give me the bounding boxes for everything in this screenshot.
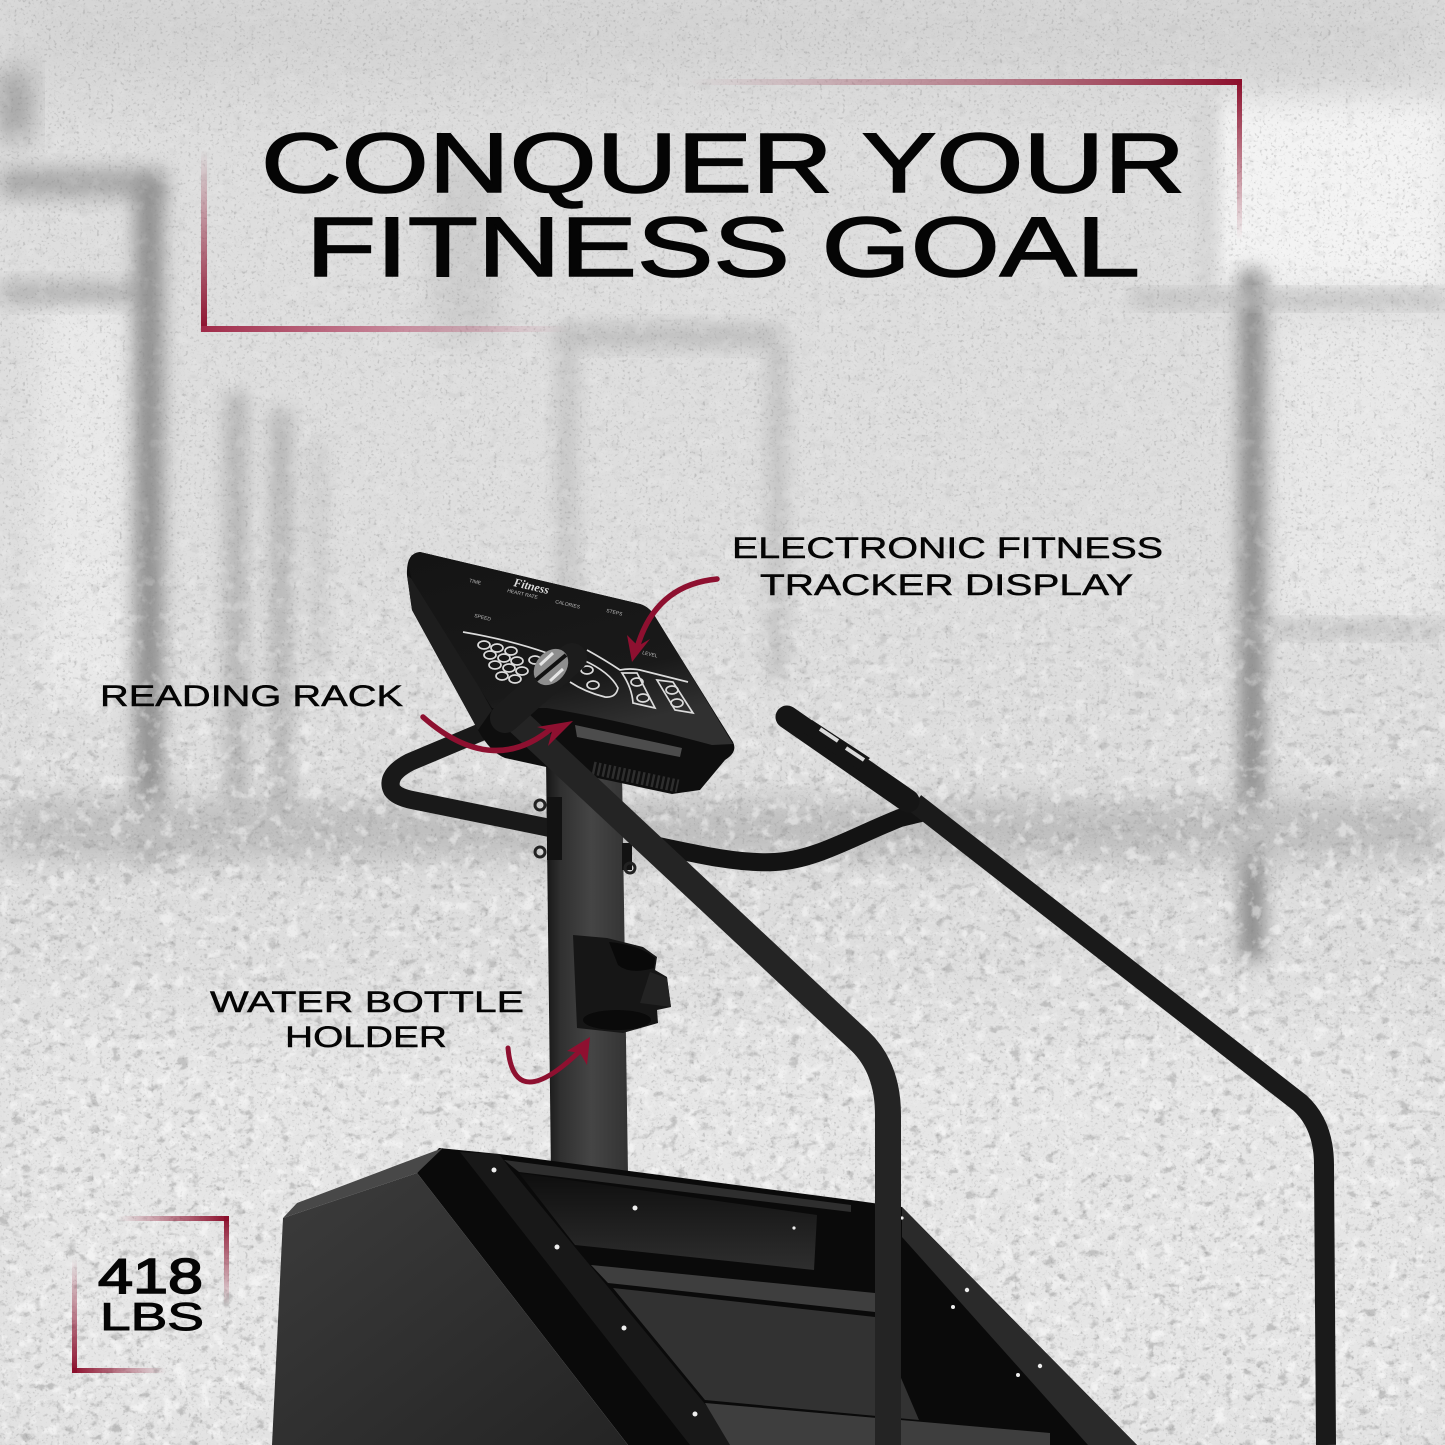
label: electronic fitness tracker display: ELECTRONIC FITNESS: [732, 532, 1163, 565]
machine: water bottle holder: [573, 935, 671, 1033]
label: electronic fitness tracker display: TRACKER DISPLAY: [760, 569, 1133, 602]
arrow: reading rack: [423, 717, 573, 751]
badge frame: [72, 1216, 229, 1373]
machine: console labels: LEVEL: [642, 650, 658, 659]
badge text: 418: [98, 1250, 203, 1304]
machine: enclosure left panel: [272, 1173, 628, 1445]
label: water bottle holder: HOLDER: [285, 1021, 447, 1054]
title: [261, 116, 1185, 294]
machine: console labels: [469, 575, 658, 659]
machine: post brackets and bolts: [535, 797, 635, 873]
title: CONQUER YOUR: [261, 116, 1185, 210]
machine: console side: [407, 575, 492, 730]
label: water bottle holder: WATER BOTTLE: [210, 986, 524, 1019]
machine: support post: [546, 760, 628, 1175]
machine: upper step nose: [591, 1265, 875, 1312]
machine: console front face: [409, 552, 733, 745]
stepper machine: [272, 552, 1326, 1445]
machine: front handrail: [510, 714, 888, 1445]
machine: console labels: CALORIES: [555, 599, 581, 611]
machine: top frame bar: [504, 1160, 851, 1212]
machine: console keypad and lines: [463, 632, 693, 713]
machine: reading rack tray: [575, 725, 682, 757]
machine: console labels: SPEED: [474, 613, 492, 623]
machine: rivets: [492, 1168, 1042, 1416]
machine: rear handle grip: [787, 717, 908, 801]
machine: cross bar loop: [390, 722, 550, 828]
machine: front handle grip: [505, 658, 572, 718]
badge text: LBS: [100, 1296, 204, 1339]
machine: stairs enclosure: [417, 1148, 1137, 1445]
machine: cross bar right arm: [640, 812, 925, 862]
arrow: water bottle holder: [508, 1037, 590, 1082]
machine: console shell: [407, 552, 734, 794]
label: electronic fitness tracker display: [732, 532, 1163, 602]
machine: enclosure chamfer: [283, 1148, 443, 1218]
machine: right rim: [902, 1207, 1137, 1445]
label: water bottle holder: [210, 986, 524, 1054]
machine: rear handrail: [915, 803, 1326, 1445]
machine: left rail band: [460, 1152, 739, 1445]
badge text: [98, 1250, 204, 1339]
machine: upper stair panel: [519, 1173, 817, 1270]
machine: rear handle sensor housing: [803, 720, 870, 770]
machine: heart rate knob: [527, 642, 575, 692]
arrow: electronic display: [627, 579, 717, 662]
machine: lower step nose: [705, 1403, 1050, 1445]
machine: console labels: Fitness: [511, 575, 551, 597]
machine: console labels: HEART RATE: [507, 588, 539, 601]
machine: rear handle plates: [820, 729, 864, 760]
title frame: [201, 79, 1242, 332]
weight badge: [72, 1216, 229, 1373]
machine: console labels: TIME: [469, 578, 482, 587]
title: FITNESS GOAL: [306, 200, 1140, 294]
machine: lower riser panel: [613, 1288, 919, 1420]
machine: vents: [593, 768, 678, 786]
machine: console labels: STEPS: [606, 608, 624, 618]
label: reading rack: READING RACK: [100, 680, 403, 713]
